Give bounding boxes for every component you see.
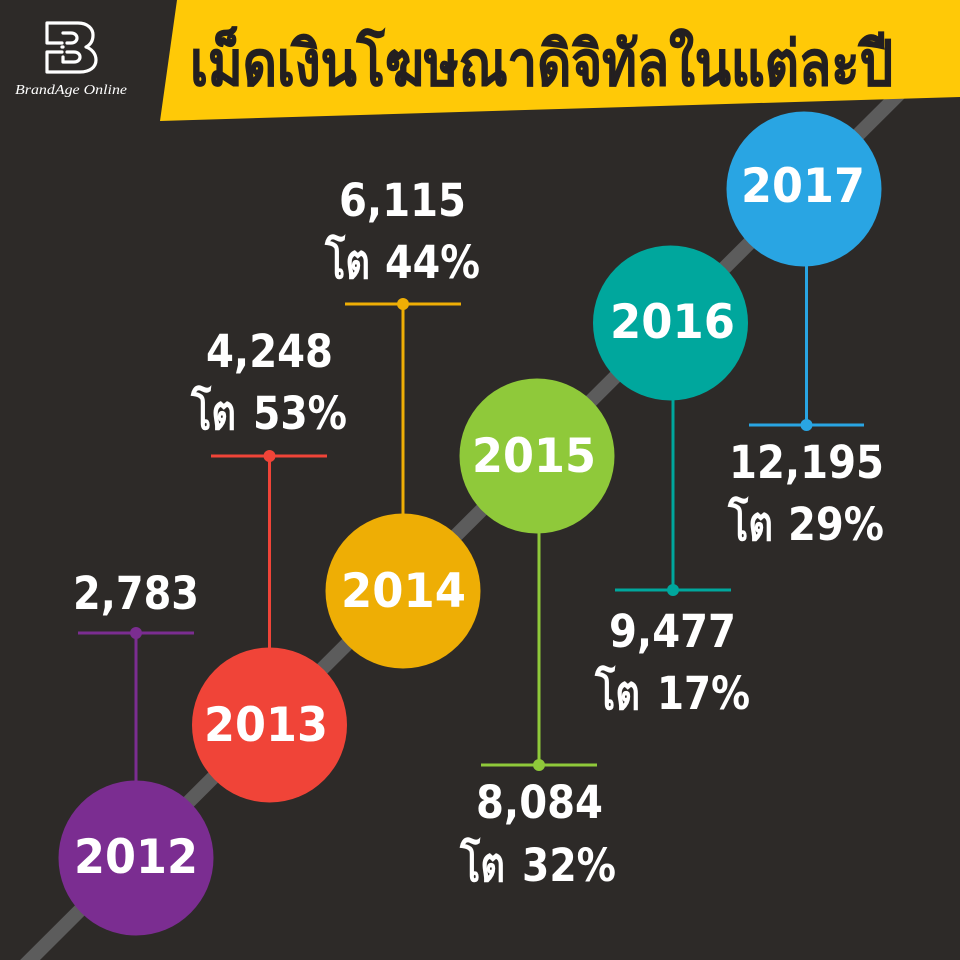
growth 2017: 29%: [788, 498, 884, 551]
growth 2013: 53%: [253, 387, 347, 440]
year 2017: 2017: [741, 159, 865, 214]
item: 2016: [593, 246, 750, 720]
growth 2017: โต: [727, 495, 773, 551]
circle 2015: [460, 378, 614, 534]
connector 2016: [615, 390, 731, 596]
item: 2014: [324, 174, 480, 668]
value 2014: 6,115: [339, 174, 466, 227]
connector 2013: [211, 450, 327, 655]
growth 2014: [324, 233, 480, 289]
growth 2014: 44%: [385, 236, 480, 289]
title banner: [160, 0, 960, 121]
icon: B monogram: [47, 23, 96, 72]
growth 2015: โต: [459, 836, 505, 892]
circle 2017: [726, 112, 882, 266]
circle 2014: [326, 514, 480, 668]
circle 2012: [58, 780, 214, 936]
growth 2016: โต: [594, 664, 640, 720]
growth 2017: [727, 495, 884, 551]
growth 2013: [190, 384, 347, 440]
connector 2015: [481, 525, 597, 771]
circle 2016: [593, 246, 748, 400]
growth 2016: 17%: [657, 667, 750, 720]
logo: BrandAge Online: [15, 23, 127, 98]
year 2014: 2014: [341, 564, 466, 619]
item: 2013: [190, 325, 347, 802]
value 2016: 9,477: [609, 605, 736, 658]
value 2012: 2,783: [73, 567, 199, 620]
logo wordmark: BrandAge Online: [15, 83, 127, 98]
year 2012: 2012: [74, 830, 198, 885]
year 2016: 2016: [610, 295, 735, 350]
connector 2012: [78, 627, 194, 790]
item: 2015: [459, 378, 616, 892]
connector 2017: [749, 260, 864, 431]
growth 2015: 32%: [522, 839, 616, 892]
connector 2014: [345, 298, 461, 520]
growth 2014: โต: [324, 233, 370, 289]
value 2015: 8,084: [476, 776, 603, 829]
value 2017: 12,195: [729, 436, 884, 489]
circle 2013: [192, 648, 347, 802]
item: 2017: [726, 112, 884, 551]
growth 2016: [594, 664, 750, 720]
year 2013: 2013: [204, 698, 328, 753]
year 2015: 2015: [472, 429, 596, 484]
growth 2015: [459, 836, 616, 892]
growth 2013: โต: [190, 384, 236, 440]
value 2013: 4,248: [206, 325, 333, 378]
item: 2012: [58, 567, 214, 936]
